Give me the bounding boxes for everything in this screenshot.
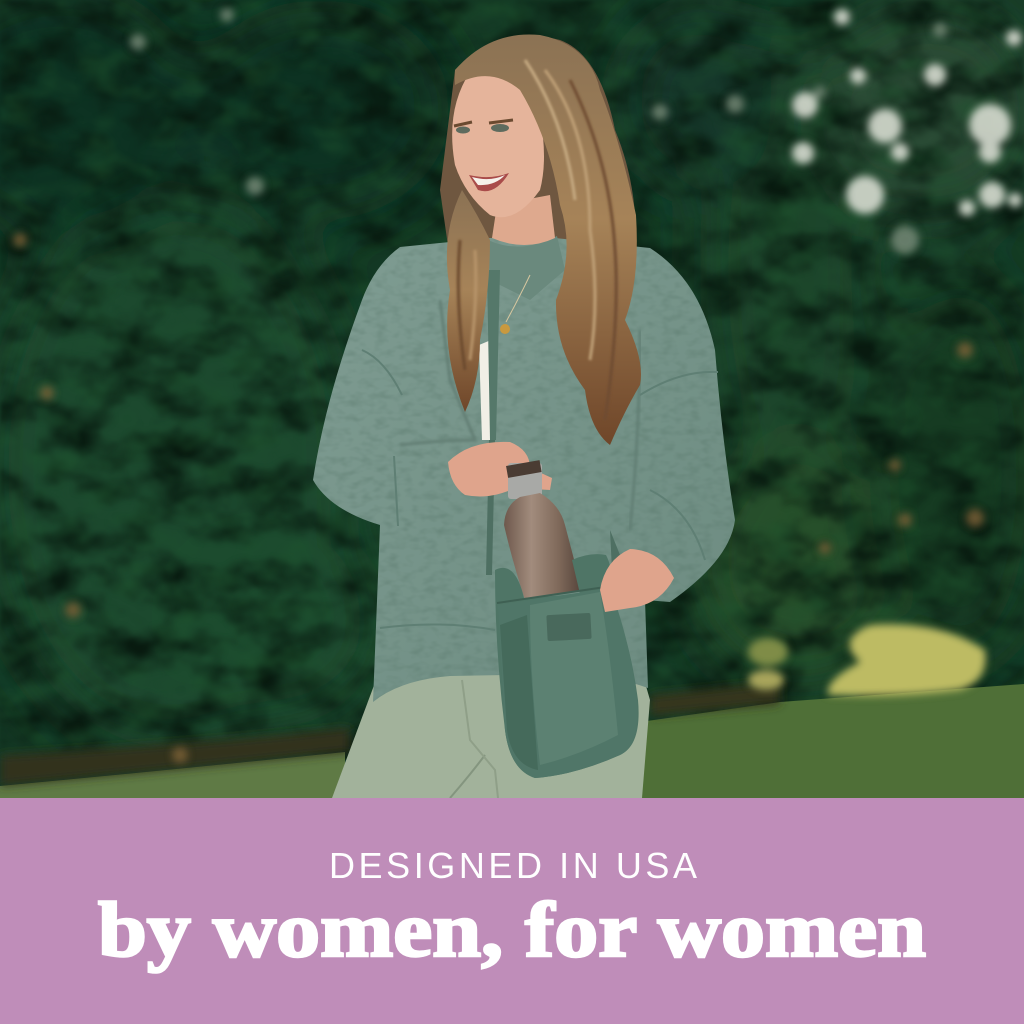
lawn [0,752,345,798]
face [452,71,544,217]
white top sliver [479,340,491,440]
woman [313,34,735,798]
bag [495,554,639,778]
banner subtitle: DESIGNED IN USA [329,845,697,886]
hand at bag [600,549,674,612]
hair front [455,34,641,445]
neck [492,195,555,245]
bokeh highlights [13,8,1022,763]
banner headline: by women, for women [98,886,926,973]
leggings [332,665,650,798]
necklace [500,275,530,334]
back hair [440,36,636,270]
bottle [504,460,582,600]
hand on bottle [448,442,552,496]
bag strap [487,270,500,440]
photo: background hedge and lawn [0,0,1024,798]
sweater body [313,238,735,702]
turtleneck collar [488,236,565,300]
banner [0,798,1024,1024]
